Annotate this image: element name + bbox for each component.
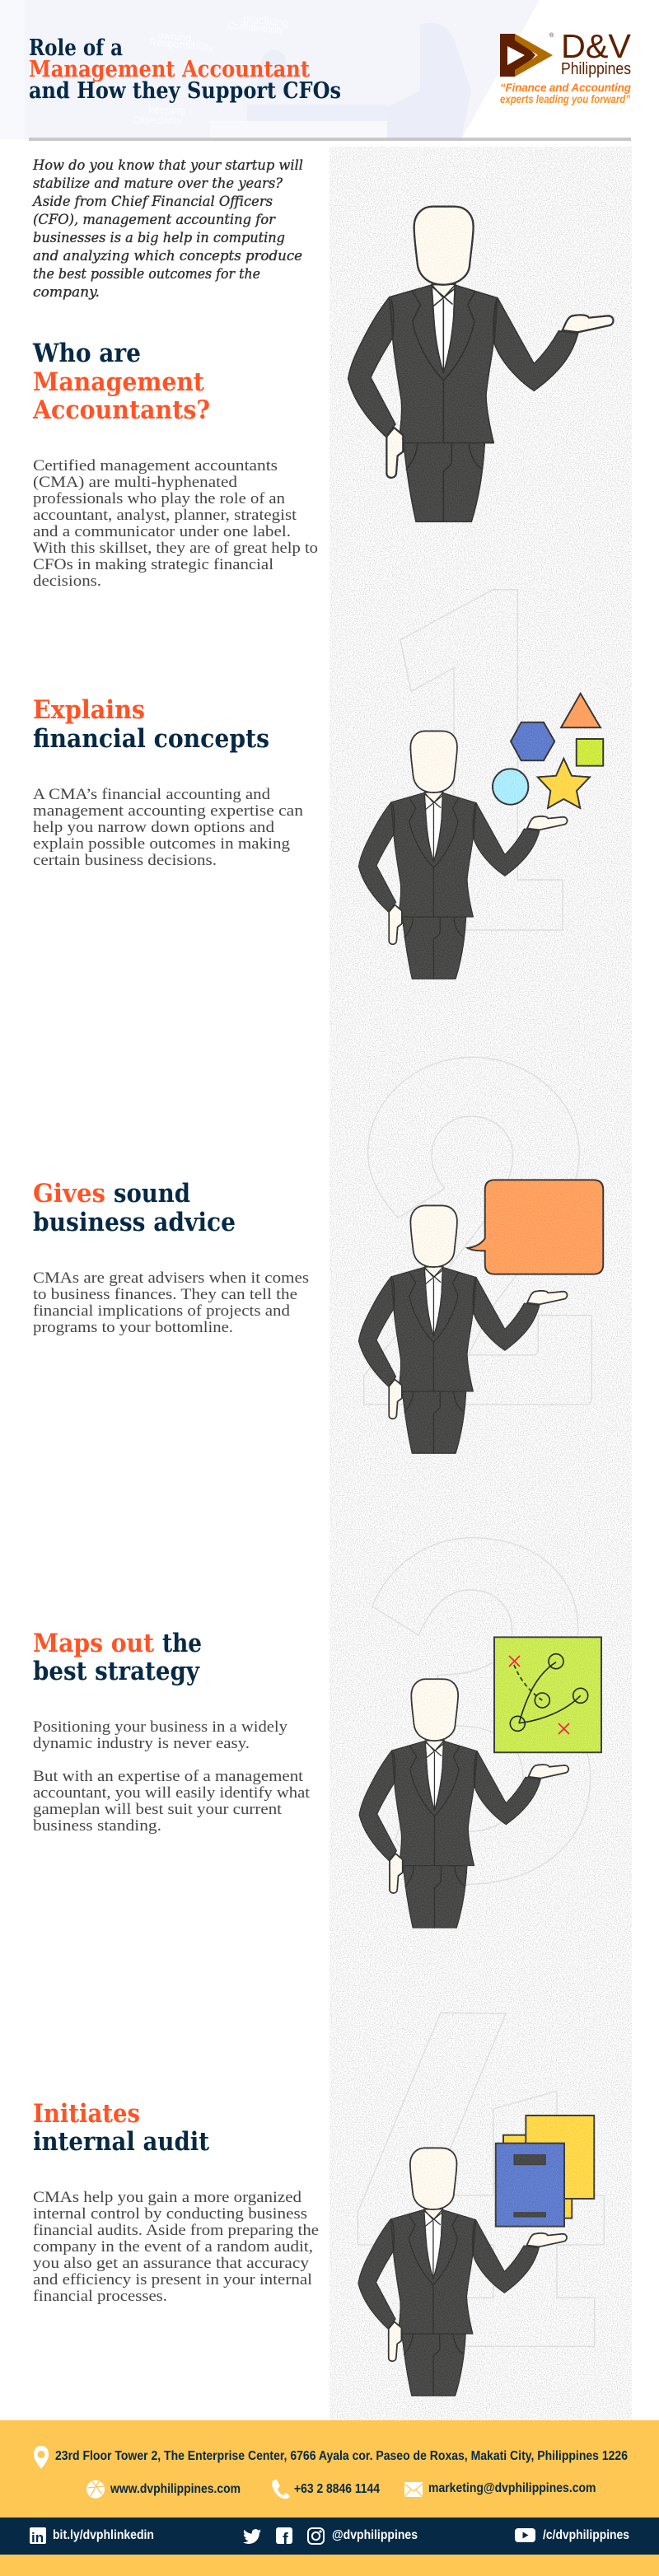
body text bbox=[33, 1269, 309, 1336]
illustration: presenter 3 bbox=[359, 1205, 568, 1453]
intro paragraph: How do you know that your startup will bbox=[32, 157, 303, 173]
ghost numeral 2 bbox=[364, 1057, 591, 1405]
body text: explain possible outcomes in making bbox=[33, 835, 291, 853]
heading: Gives bbox=[33, 1179, 105, 1209]
body text: management accounting expertise can bbox=[33, 802, 304, 820]
body text: A CMA’s financial accounting and bbox=[33, 786, 271, 803]
heading bbox=[33, 2099, 210, 2157]
title bbox=[29, 35, 341, 104]
icon: linkedin: in bbox=[31, 2530, 44, 2546]
intro paragraph: the best possible outcomes for the bbox=[33, 266, 260, 282]
body text: accountant, you will easily identify what bbox=[33, 1784, 311, 1802]
header background photo: practicing bbox=[243, 12, 289, 29]
section: who are management accountants bbox=[32, 339, 318, 590]
logo: D&V Philippines: ® bbox=[549, 32, 554, 39]
linkedin link: bit.ly/dvphlinkedin bbox=[53, 2528, 154, 2542]
body text: professionals who play the role of an bbox=[33, 490, 286, 507]
logo: D&V Philippines: “Finance and Accounting bbox=[500, 82, 632, 94]
body text: financial audits. Aside from preparing the bbox=[33, 2222, 319, 2239]
body text: financial implications of projects and bbox=[33, 1302, 291, 1320]
body text: help you narrow down options and bbox=[33, 819, 275, 836]
ghost numeral 4 bbox=[358, 2013, 604, 2346]
heading bbox=[32, 339, 210, 425]
footer: contact band bbox=[0, 2420, 659, 2576]
youtube channel: /c/dvphilippines bbox=[543, 2528, 629, 2542]
body text: (CMA) are multi-hyphenated bbox=[33, 474, 238, 491]
intro paragraph: company. bbox=[33, 284, 100, 300]
instagram handle: @dvphilippines bbox=[332, 2528, 418, 2542]
body text: business standing. bbox=[33, 1817, 161, 1835]
header background photo: Objectivity bbox=[133, 114, 182, 126]
body text: With this skillset, they are of great help to bbox=[33, 540, 318, 557]
icon: speech bubble bbox=[468, 1180, 603, 1274]
heading bbox=[33, 1179, 236, 1237]
section: gives sound business advice bbox=[33, 1179, 309, 1336]
icon: globe bbox=[86, 2480, 105, 2499]
icon: logo arrows bbox=[500, 34, 553, 77]
heading: business advice bbox=[33, 1208, 236, 1237]
icon: triangle bbox=[561, 694, 601, 727]
heading: Accountants? bbox=[32, 395, 210, 425]
heading: Who are bbox=[32, 339, 141, 368]
icon: facebook: f bbox=[283, 2531, 288, 2549]
body text bbox=[33, 2189, 319, 2305]
title: and How they Support CFOs bbox=[29, 78, 341, 104]
illustration: presenter 1 bbox=[348, 207, 614, 521]
heading: Explains bbox=[33, 695, 145, 725]
icon: linkedin bbox=[30, 2527, 46, 2546]
body text: to business finances. They can tell the bbox=[33, 1286, 297, 1303]
logo: D&V Philippines: experts leading you forward” bbox=[500, 93, 630, 105]
body text bbox=[33, 1718, 311, 1835]
intro paragraph bbox=[31, 157, 303, 300]
body text: certain business decisions. bbox=[33, 852, 217, 869]
icon: star bbox=[538, 759, 590, 808]
heading: financial concepts bbox=[33, 724, 269, 754]
intro paragraph: and analyzing which concepts produce bbox=[33, 248, 302, 264]
title: Management Accountant bbox=[29, 57, 310, 82]
icon: hexagon bbox=[511, 722, 554, 760]
icon: phone bbox=[272, 2480, 290, 2499]
icon: twitter bbox=[243, 2529, 261, 2544]
ghost numeral 1 bbox=[400, 590, 563, 930]
intro paragraph: stabilize and mature over the years? bbox=[33, 175, 283, 191]
phone number: +63 2 8846 1144 bbox=[294, 2482, 380, 2496]
header background photo: Confidentiality bbox=[227, 19, 284, 36]
icon: location pin bbox=[34, 2446, 49, 2469]
body text: gameplan will best suit your current bbox=[33, 1801, 283, 1818]
header background photo: owning bbox=[157, 29, 192, 44]
heading: best strategy bbox=[33, 1657, 200, 1686]
panel: speckled illustration column bbox=[330, 147, 632, 2420]
section: maps out the best strategy bbox=[33, 1629, 311, 1835]
body text bbox=[33, 786, 304, 869]
logo: D&V Philippines: Philippines bbox=[561, 60, 631, 78]
heading: Maps out bbox=[33, 1629, 155, 1658]
header background photo: keeping bbox=[148, 104, 186, 116]
body text: internal control by conducting business bbox=[33, 2205, 307, 2223]
icon: back folder bbox=[503, 2135, 572, 2218]
icon: square bbox=[577, 739, 603, 766]
body text bbox=[33, 457, 318, 590]
icon: documents bbox=[496, 2115, 594, 2227]
heading: internal audit bbox=[33, 2127, 210, 2157]
body text: dynamic industry is never easy. bbox=[33, 1735, 250, 1752]
icon: strategy board bbox=[494, 1637, 601, 1752]
body text: decisions. bbox=[33, 573, 101, 590]
icon: front folder bbox=[496, 2144, 564, 2227]
heading: Initiates bbox=[33, 2099, 140, 2129]
heading: sound bbox=[114, 1179, 190, 1209]
illustration: presenter 4 bbox=[359, 1679, 568, 1928]
icon: middle folder bbox=[526, 2115, 594, 2199]
email: marketing@dvphilippines.com bbox=[428, 2481, 596, 2495]
intro paragraph: Aside from Chief Financial Officers bbox=[31, 194, 273, 209]
body text: and a communicator under one label. bbox=[33, 523, 291, 540]
logo: D&V Philippines: D&V bbox=[561, 27, 632, 65]
header background photo bbox=[0, 0, 540, 139]
heading bbox=[33, 1629, 202, 1686]
body text: you also get an assurance that accuracy bbox=[33, 2255, 310, 2272]
body text: CMAs help you gain a more organized bbox=[33, 2189, 302, 2206]
body text: and efficiency is present in your internal bbox=[33, 2271, 312, 2288]
icon: youtube bbox=[515, 2528, 535, 2542]
body text: Certified management accountants bbox=[33, 457, 278, 475]
heading: Management bbox=[33, 367, 205, 397]
logo: D&V Philippines bbox=[500, 27, 632, 105]
heading: the bbox=[162, 1629, 202, 1658]
title: Role of a bbox=[29, 35, 123, 61]
illustration: presenter 2 bbox=[359, 731, 568, 979]
icon: envelope bbox=[404, 2482, 423, 2497]
icon: circle bbox=[493, 769, 528, 805]
body text: accountant, analyst, planner, strategist bbox=[33, 507, 297, 524]
body text: CFOs in making strategic financial bbox=[33, 556, 273, 573]
icon: instagram bbox=[308, 2528, 324, 2544]
body text: company in the event of a random audit, bbox=[33, 2238, 313, 2256]
body text: financial processes. bbox=[33, 2288, 167, 2305]
body text: But with an expertise of a management bbox=[33, 1768, 304, 1785]
illustration: presenter 5 bbox=[358, 2148, 567, 2396]
website: www.dvphilippines.com bbox=[110, 2482, 241, 2496]
intro paragraph: (CFO), management accounting for bbox=[33, 212, 276, 227]
section: initiates internal audit bbox=[33, 2099, 319, 2305]
ghost numeral 3 bbox=[372, 1538, 591, 1884]
icon: floating shapes bbox=[493, 694, 603, 808]
icon: facebook bbox=[276, 2527, 292, 2549]
intro paragraph: businesses is a big help in computing bbox=[33, 230, 285, 245]
header background photo: Responsibility bbox=[149, 35, 214, 54]
header band bbox=[0, 0, 632, 141]
section: explains financial concepts bbox=[33, 695, 304, 869]
heading bbox=[33, 695, 269, 754]
body text: CMAs are great advisers when it comes bbox=[33, 1269, 309, 1287]
body text: programs to your bottomline. bbox=[33, 1319, 233, 1336]
body text: Positioning your business in a widely bbox=[33, 1718, 288, 1736]
footer: social bar bbox=[0, 2518, 659, 2555]
